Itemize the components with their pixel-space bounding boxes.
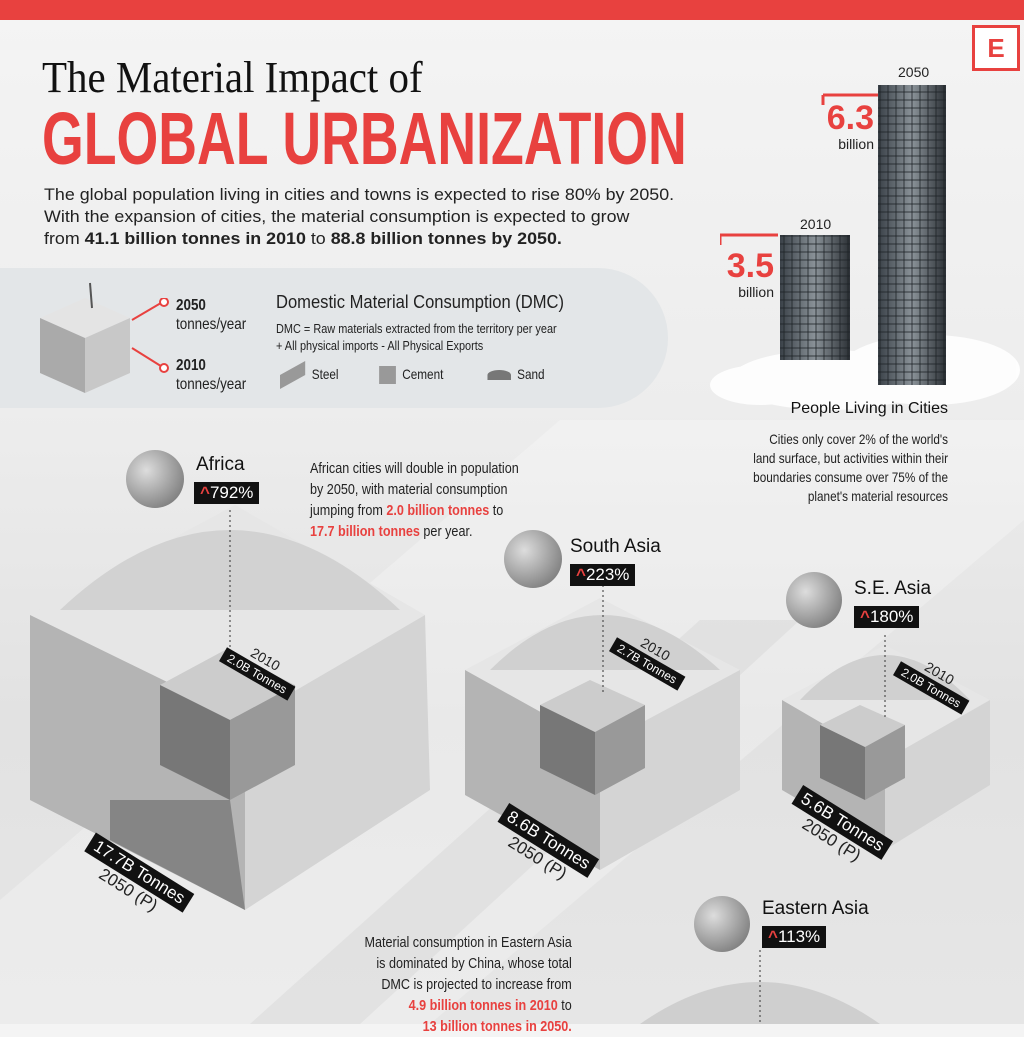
- region: Africa: [126, 450, 259, 508]
- text: Eastern Asia: [365, 934, 572, 1035]
- intro text: The global population living in cities and towns is expected to rise 80% by 2050.: [44, 185, 674, 204]
- labels: 2010 values: [219, 644, 296, 701]
- label 2050: tonnes/year: [176, 316, 246, 333]
- title: GLOBAL URBANIZATION: [42, 97, 687, 180]
- labels: 2050 values: 2050 (P): [96, 865, 161, 915]
- text: 2.7B Tonnes: [615, 641, 679, 687]
- text: cities cover: Cities only cover 2% of the world's: [769, 431, 948, 447]
- heading: people living in cities: People Living in Cities: [791, 400, 948, 417]
- text: cities cover: planet's material resources: [808, 488, 948, 504]
- intro text: [44, 185, 674, 248]
- label 2010: 2010: [176, 357, 206, 374]
- legend items: Steel Cement Sand: [312, 366, 545, 382]
- text: Africa: 17.7 billion tonnes per year.: [310, 523, 472, 540]
- label 2050: [176, 297, 246, 333]
- logo: E: [987, 33, 1005, 63]
- text: 2010: [638, 634, 673, 664]
- labels: 2010 values: 2.0B Tonnes: [225, 651, 289, 697]
- region: Africa: ^792%: [200, 483, 253, 502]
- top red bar: [0, 0, 1024, 20]
- region: Eastern Asia: Eastern Asia: [762, 898, 869, 919]
- text: Eastern Asia: 4.9 billion tonnes in 2010 to: [409, 997, 572, 1014]
- logo: [972, 25, 1020, 71]
- label 2050: 2050: [176, 297, 206, 314]
- chart: skyscrapers: [720, 85, 946, 385]
- region: South Asia: South Asia: [570, 536, 661, 557]
- text: 6.3: [827, 99, 874, 137]
- text: Eastern Asia: DMC is projected to increase from: [382, 976, 572, 993]
- text: Eastern Asia: is dominated by China, whose total: [377, 955, 572, 972]
- text: 5.6B Tonnes: [798, 789, 888, 855]
- connectors: [132, 298, 169, 373]
- region: South Asia: ^223%: [576, 565, 629, 584]
- region: SE Asia: S.E. Asia: [854, 578, 931, 599]
- text: 2050 (P): [505, 833, 570, 883]
- DMC formula: DMC = Raw materials extracted from the territory per year: [276, 321, 557, 336]
- region: Eastern Asia: ^113%: [768, 927, 820, 946]
- text: 3.5: [727, 247, 774, 285]
- text: 2010: [922, 658, 957, 688]
- title: [42, 53, 687, 180]
- label 2010: tonnes/year: [176, 376, 246, 393]
- label: 2010 building: 2010: [800, 216, 831, 232]
- text: Africa: African cities will double in population: [310, 460, 519, 477]
- legend items: [280, 361, 545, 389]
- DMC formula: + All physical imports - All Physical Exports: [276, 338, 483, 353]
- text: Eastern Asia: Material consumption in Eastern Asia: [365, 934, 572, 951]
- Africa cube: [30, 505, 430, 910]
- region: Africa: Africa: [196, 454, 245, 475]
- DMC heading: Domestic Material Consumption (DMC): [276, 292, 564, 312]
- South Asia cube: [465, 585, 740, 870]
- labels: 2010 values: 2010: [248, 644, 283, 674]
- SE Asia cube: [782, 635, 990, 850]
- label 2010: [176, 357, 246, 393]
- labels: 2050 values: 17.7B Tonnes: [90, 837, 188, 908]
- text: Africa: by 2050, with material consumption: [310, 481, 508, 498]
- text: cities cover: [753, 431, 948, 504]
- DMC formula: [276, 321, 557, 353]
- title: The Material Impact of: [42, 53, 423, 102]
- intro text: from 41.1 billion tonnes in 2010 to 88.8 billion tonnes by 2050.: [44, 229, 562, 248]
- text: 2.0B Tonnes: [899, 665, 963, 711]
- label: 2050 building: 2050: [898, 64, 929, 80]
- text: Africa: [310, 460, 519, 540]
- Eastern Asia mound: [640, 950, 880, 1024]
- icon: cube: [40, 282, 130, 393]
- text: 8.6B Tonnes: [504, 807, 594, 873]
- region: SE Asia: ^180%: [860, 607, 913, 626]
- text: 2050 (P): [799, 815, 864, 865]
- text: cities cover: boundaries consume over 75% of the: [753, 469, 948, 485]
- text: Africa: jumping from 2.0 billion tonnes to: [310, 502, 503, 519]
- cubes: [30, 510, 990, 1024]
- text: billion: [738, 284, 774, 300]
- panel: DMC legend: [0, 268, 668, 408]
- text: 13 billion tonnes in 2050.: [423, 1018, 572, 1035]
- region: SE Asia: [786, 572, 932, 628]
- region: Eastern Asia: [694, 896, 869, 952]
- intro text: With the expansion of cities, the material consumption is expected to grow: [44, 207, 629, 226]
- region: South Asia: [504, 530, 661, 588]
- text: cities cover: land surface, but activities within their: [753, 450, 948, 466]
- text: billion: [838, 136, 874, 152]
